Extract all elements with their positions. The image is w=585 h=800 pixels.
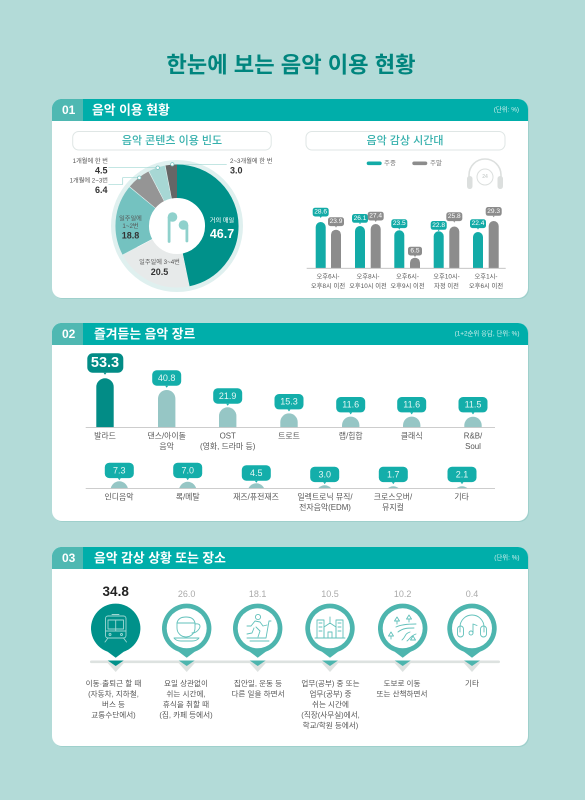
label: other activities: 집안일, 운동 등 — [234, 678, 282, 688]
value labels: genres row 2: 3.0 — [318, 469, 331, 479]
value labels: genres row 1: 40.8 — [158, 373, 175, 383]
slice label: almost every day: 46.7 — [210, 227, 234, 241]
axis labels: genres row 1: (영화, 드라마 등) — [200, 441, 256, 451]
callout: once a month: 4.5 — [95, 166, 108, 176]
icon: coffee cup — [174, 617, 200, 641]
callout: once in 2-3 months: 3.0 — [230, 166, 243, 176]
callout: 2-3 times a month — [70, 176, 141, 195]
axis labels: genres row 1: 클래식 — [401, 432, 423, 440]
value labels: genres row 1: 21.9 — [219, 391, 236, 401]
item: other activities — [231, 589, 285, 698]
callout: once a month: 1개월에 한 번 — [73, 157, 108, 165]
value labels: genres row 1: 11.5 — [465, 400, 481, 410]
value labels: genres row 1: 11.6 — [342, 400, 359, 410]
value labels: listening time: 23.5 — [393, 220, 406, 227]
value labels: genres row 2: 1.7 — [387, 469, 400, 479]
icon: earphones — [168, 212, 188, 243]
axis labels: genres row 1 — [94, 430, 483, 451]
subheading: listening time: 음악 감상 시간대 — [367, 133, 443, 147]
heading: section 01: 음악 이용 현황 — [92, 102, 170, 118]
item: work or study — [301, 589, 360, 730]
axis labels: listening time: 오후6시- — [396, 272, 419, 280]
item: other — [447, 589, 497, 688]
panel: 03 listening situations — [52, 547, 529, 747]
legend: weekday and weekend — [367, 159, 442, 167]
item: work or study: 10.5 — [321, 589, 339, 599]
heading: section 02: 즐겨듣는 음악 장르 — [94, 326, 196, 342]
axis labels: genres row 1: 랩/힙합 — [339, 430, 363, 440]
value labels: listening time: 29.3 — [487, 208, 500, 215]
icon: headphones with note — [458, 615, 486, 637]
bar chart: genres row 2 — [86, 463, 495, 512]
label: other: 기타 — [465, 679, 479, 688]
callout: once a month — [73, 157, 159, 176]
axis labels: genres row 2: 기타 — [454, 492, 470, 502]
icon: office buildings — [315, 617, 345, 638]
label: other activities: 다른 일을 하면서 — [231, 688, 285, 698]
panel: 02 favourite genres — [52, 323, 529, 522]
value labels: listening time — [313, 207, 502, 257]
value labels: listening time: 28.6 — [314, 209, 327, 216]
axis labels: listening time: 오후10시- — [433, 272, 460, 280]
value labels: genres row 2: 7.0 — [181, 465, 194, 475]
axis labels: genres row 2: 전자음악(EDM) — [299, 502, 351, 512]
axis labels: listening time: 오후9시 이전 — [390, 281, 425, 290]
callout: 2-3 times a month: 1개월에 2~3번 — [70, 176, 108, 184]
value labels: genres row 2: 2.1 — [456, 469, 468, 479]
axis labels: listening time: 자정 이전 — [434, 281, 459, 290]
axis labels: genres row 1: 음악 — [159, 441, 174, 451]
label: walking: 도보로 이동 — [383, 678, 421, 688]
value labels: listening time: 25.8 — [448, 213, 461, 220]
icon: 24h headphones: 24 — [482, 174, 488, 180]
axis labels: listening time: 오후6시- — [317, 272, 339, 280]
item: walking — [376, 589, 428, 698]
unit note: (1+2순위 응답, 단위: %) — [455, 328, 520, 338]
slice label: almost every day — [210, 216, 235, 241]
timeline line — [90, 660, 500, 663]
value labels: genres row 2: 7.3 — [113, 465, 126, 475]
value labels: genres row 2 — [105, 463, 477, 484]
axis labels: genres row 2: 일렉트로닉 뮤직/ — [297, 492, 353, 502]
label: work or study: 쉬는 시간에 — [312, 699, 349, 709]
panel: 01 music usage status — [52, 99, 529, 747]
callout: once in 2-3 months — [171, 157, 273, 176]
label: resting: 요일 상관없이 — [164, 678, 208, 688]
donut chart: usage frequency — [111, 160, 243, 292]
axis labels: listening time: 오후1시- — [475, 272, 497, 280]
slice label: 3-4 times a week: 일주일에 3~4번 — [139, 258, 180, 266]
label: work or study: (직장(사무실)에서, — [301, 710, 360, 720]
value labels: genres row 1: 11.6 — [403, 400, 420, 410]
label: walking — [376, 678, 428, 698]
heading: section 03: 03 — [62, 551, 76, 565]
slice label: 1-2 times a week: 일주일에 — [119, 214, 142, 222]
value labels: listening time: 22.8 — [432, 222, 445, 229]
axis labels: listening time: 오후8시- — [357, 272, 379, 280]
item: commuting: 34.8 — [103, 584, 129, 599]
axis labels: listening time: 오후8시 이전 — [311, 281, 345, 290]
axis labels: genres row 1: R&B/ — [464, 432, 483, 440]
heading: section 03: 음악 감상 상황 또는 장소 — [94, 550, 226, 566]
slice label: 1-2 times a week: 18.8 — [122, 230, 139, 240]
callout: 2-3 times a month: 6.4 — [95, 185, 108, 195]
callout: once in 2-3 months: 2~3개월에 한 번 — [230, 157, 273, 165]
icon: 24h headphones — [467, 159, 503, 189]
item: other activities: 18.1 — [249, 589, 266, 599]
label: commuting — [86, 678, 141, 720]
heading: section 01: 01 — [62, 103, 76, 117]
label: resting: 휴식을 취할 때 — [163, 699, 209, 709]
axis labels: genres row 1: 트로트 — [278, 432, 300, 440]
subheading: content usage frequency: 음악 콘텐츠 이용 빈도 — [122, 134, 222, 147]
axis labels: genres row 1: Soul — [465, 442, 481, 451]
label: work or study: 업무(공부) 중 또는 — [301, 679, 360, 688]
label: walking: 또는 산책하면서 — [376, 688, 428, 698]
label: commuting: 교통수단에서) — [91, 710, 136, 720]
item: resting: 26.0 — [178, 589, 195, 599]
bar chart: genres row 1 — [86, 353, 495, 451]
label: commuting: 버스 등 — [102, 699, 125, 709]
unit note: (단위: %) — [494, 104, 519, 114]
label: work or study: 학교/학원 등에서) — [303, 720, 359, 730]
bar chart: listening time — [307, 207, 506, 290]
label: resting — [159, 678, 213, 720]
axis labels: genres row 2 — [104, 492, 470, 512]
value labels: genres row 1: 15.3 — [280, 397, 298, 407]
slice label: almost every day: 거의 매일 — [210, 216, 235, 224]
label: resting: (집, 카페 등에서) — [159, 710, 213, 720]
legend: weekday and weekend: 주중 — [384, 159, 396, 167]
label: other activities — [231, 678, 285, 698]
slice label: 1-2 times a week — [119, 214, 142, 240]
icon: train — [105, 614, 126, 642]
slice label: 3-4 times a week: 20.5 — [151, 267, 168, 277]
item: commuting — [86, 584, 141, 720]
infographic canvas — [52, 54, 529, 747]
item: walking: 10.2 — [394, 589, 411, 599]
title: 한눈에 보는 음악 이용 현황 — [166, 52, 416, 78]
subheading: content usage frequency — [73, 132, 271, 150]
axis labels: listening time: 오후6시 이전 — [469, 281, 503, 290]
axis labels: genres row 2: 뮤지컬 — [382, 503, 404, 512]
value labels: listening time: 23.9 — [330, 218, 343, 225]
item: resting — [159, 589, 213, 720]
item: other: 0.4 — [466, 589, 478, 599]
value labels: listening time: 22.4 — [472, 220, 485, 227]
axis labels: genres row 2: 록/메탈 — [176, 492, 200, 502]
label: work or study: 업무(공부) 중 — [309, 690, 352, 698]
icon: treadmill runner — [247, 614, 271, 641]
value labels: genres row 2: 4.5 — [250, 468, 263, 478]
axis labels: genres row 1: OST — [220, 432, 236, 440]
axis labels: listening time — [311, 272, 503, 290]
unit note: (단위: %) — [494, 552, 520, 562]
subheading: listening time — [306, 132, 505, 150]
value labels: listening time: 26.1 — [354, 215, 367, 222]
value labels: genres row 1: 53.3 — [91, 355, 119, 371]
axis labels: listening time: 오후10시 이전 — [349, 281, 387, 290]
axis labels: genres row 1: 발라드 — [94, 430, 116, 440]
label: commuting: (자동차, 지하철, — [88, 688, 139, 698]
legend: weekday and weekend: 주말 — [430, 159, 442, 167]
axis labels: genres row 2: 인디음악 — [104, 492, 134, 502]
label: resting: 쉬는 시간에, — [166, 688, 206, 698]
value labels: genres row 1 — [87, 353, 488, 414]
slice label: 3-4 times a week — [139, 258, 180, 277]
axis labels: genres row 2: 크로스오버/ — [374, 492, 413, 502]
value labels: listening time: 6.5 — [410, 248, 420, 255]
axis labels: genres row 1: 댄스/아이돌 — [147, 430, 186, 440]
value labels: listening time: 27.4 — [369, 213, 382, 220]
label: work or study — [301, 679, 360, 730]
slice label: 1-2 times a week: 1~2번 — [122, 222, 139, 230]
icon: walking path with trees — [388, 615, 416, 641]
label: commuting: 이동·출퇴근 할 때 — [86, 678, 141, 688]
axis labels: genres row 2: 재즈/퓨전재즈 — [233, 492, 279, 502]
heading: section 02: 02 — [62, 327, 76, 341]
